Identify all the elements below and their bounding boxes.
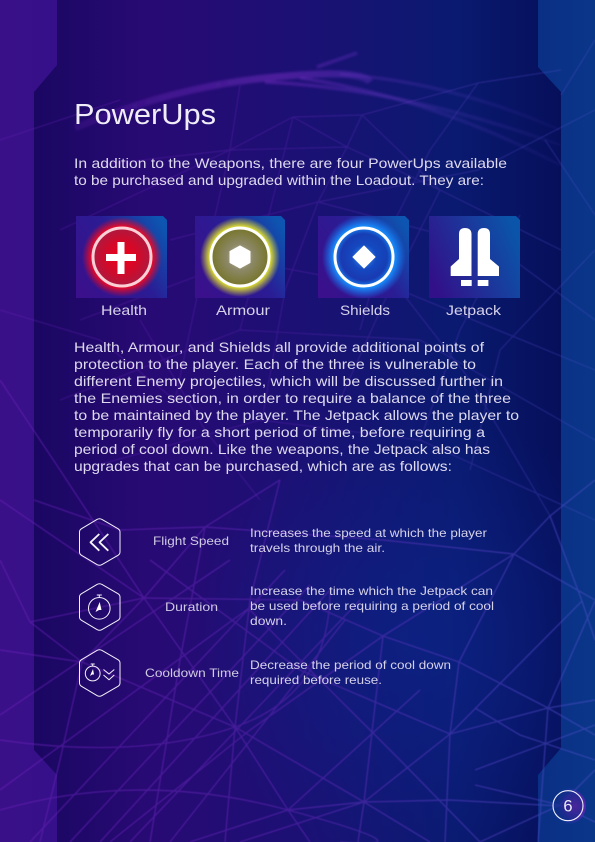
powerup: armour bbox=[195, 216, 285, 318]
upgrade row: duration bbox=[80, 584, 494, 630]
label: health: Health bbox=[101, 302, 147, 318]
tile: armour bbox=[195, 216, 285, 298]
tile: jetpack bbox=[429, 216, 520, 298]
background wireframe mesh: lower faces bbox=[0, 380, 595, 842]
label: cooldown time: Cooldown Time bbox=[145, 667, 239, 680]
description: flight speed: travels through the air. bbox=[250, 542, 385, 555]
icon: stopwatch and down chevrons hexagon bbox=[80, 650, 120, 696]
description: cooldown time bbox=[250, 659, 451, 687]
description: duration: Increase the time which the Jetpack can bbox=[250, 585, 493, 598]
intro text bbox=[74, 155, 507, 188]
label: armour: Armour bbox=[216, 302, 270, 318]
label: jetpack: Jetpack bbox=[446, 302, 502, 318]
body text: temporarily fly for a short period of time, before requiring a bbox=[74, 424, 485, 440]
icon: health cross bbox=[82, 217, 162, 297]
description: duration bbox=[250, 585, 494, 628]
powerup: shields bbox=[318, 215, 409, 318]
tile: shields bbox=[318, 216, 409, 298]
intro text: to be purchased and upgraded within the Loadout. They are: bbox=[74, 172, 484, 188]
page number badge: 6 bbox=[563, 798, 573, 816]
body text: protection to the player. Each of the three is vulnerable to bbox=[74, 356, 476, 372]
label: flight speed: Flight Speed bbox=[153, 535, 229, 548]
body text: upgrades that can be purchased, which are as follows: bbox=[74, 458, 452, 474]
icon: armour hexagon bbox=[200, 217, 280, 297]
body text: different Enemy projectiles, which will be discussed further in bbox=[74, 373, 503, 389]
label: duration: Duration bbox=[165, 601, 218, 614]
background wireframe mesh: upper arc bbox=[75, 53, 560, 165]
description: duration: be used before requiring a period of cool bbox=[250, 600, 494, 613]
icon: stopwatch hexagon bbox=[80, 584, 120, 630]
icon: double chevron hexagon bbox=[80, 519, 120, 565]
intro text: In addition to the Weapons, there are four PowerUps available bbox=[74, 155, 507, 171]
powerup: health bbox=[76, 216, 167, 318]
background wireframe mesh: upper faces bbox=[0, 40, 595, 520]
description: cooldown time: Decrease the period of cool down bbox=[250, 659, 451, 672]
upgrade row: cooldown time bbox=[80, 650, 451, 696]
body text: period of cool down. Like the weapons, the Jetpack also has bbox=[74, 441, 490, 457]
label: shields: Shields bbox=[340, 302, 390, 318]
icon: shields diamond bbox=[322, 215, 406, 299]
description: duration: down. bbox=[250, 615, 287, 628]
description: flight speed bbox=[250, 527, 487, 555]
icon: jetpack bbox=[451, 228, 499, 286]
body text: the Enemies section, in order to require a balance of the three bbox=[74, 390, 511, 406]
tile: health bbox=[76, 216, 167, 298]
body text: Health, Armour, and Shields all provide additional points of bbox=[74, 339, 484, 355]
description: cooldown time: required before reuse. bbox=[250, 674, 382, 687]
upgrade row: flight speed bbox=[80, 519, 487, 565]
body text bbox=[74, 339, 519, 474]
body text: to be maintained by the player. The Jetpack allows the player to bbox=[74, 407, 519, 423]
powerup: jetpack bbox=[429, 216, 520, 318]
description: flight speed: Increases the speed at which the player bbox=[250, 527, 487, 540]
title: PowerUps bbox=[74, 99, 216, 131]
page number badge bbox=[550, 788, 586, 824]
